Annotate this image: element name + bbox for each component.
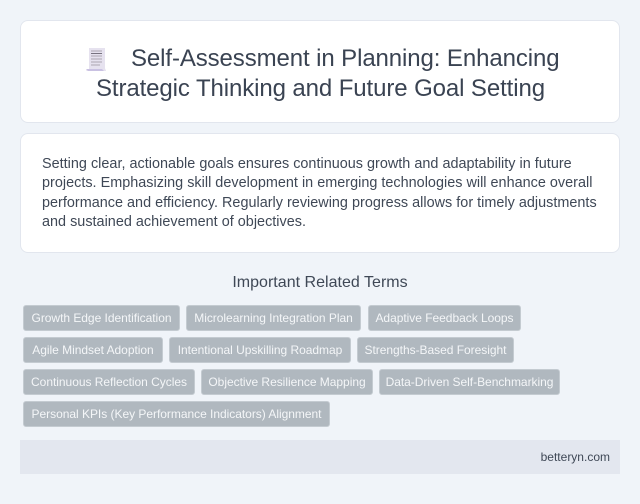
tag <box>186 305 361 331</box>
tag: Objective Resilience Mapping <box>208 375 366 389</box>
title text: Self-Assessment in Planning: Enhancing <box>131 45 559 72</box>
tag: Intentional Upskilling Roadmap <box>178 343 342 357</box>
description text: performance and efficiency. Regularly reviewing progress allows for timely adjustments <box>42 195 597 211</box>
description text: projects. Emphasizing skill development in emerging technologies will enhance overall <box>42 175 592 191</box>
title text: Strategic Thinking and Future Goal Setting <box>96 75 545 102</box>
description text: Setting clear, actionable goals ensures continuous growth and adaptability in future <box>42 156 572 172</box>
footer text: betteryn.com <box>541 450 610 464</box>
tag <box>23 337 163 363</box>
footer bar <box>20 440 620 474</box>
tag <box>368 305 521 331</box>
tag: Microlearning Integration Plan <box>194 311 353 325</box>
title text <box>96 45 559 102</box>
tag: Agile Mindset Adoption <box>32 343 154 357</box>
tag <box>169 337 351 363</box>
tag list <box>23 305 560 427</box>
tag: Data-Driven Self-Benchmarking <box>386 375 553 389</box>
tag: Personal KPIs (Key Performance Indicators) Alignment <box>32 407 321 421</box>
panel: description card <box>20 133 620 253</box>
tag <box>23 305 180 331</box>
panel: title card <box>20 20 620 123</box>
tag <box>357 337 514 363</box>
tag: Continuous Reflection Cycles <box>31 375 187 389</box>
tag: Strengths-Based Foresight <box>364 343 506 357</box>
tag: Growth Edge Identification <box>32 311 171 325</box>
description text: and sustained achievement of objectives. <box>42 214 306 230</box>
heading: related terms: Important Related Terms <box>232 274 408 291</box>
tag <box>379 369 560 395</box>
tag: Adaptive Feedback Loops <box>375 311 514 325</box>
description text <box>42 156 597 230</box>
tag <box>23 401 330 427</box>
tag <box>23 369 195 395</box>
tag <box>201 369 373 395</box>
icon: document receipt <box>86 48 106 71</box>
